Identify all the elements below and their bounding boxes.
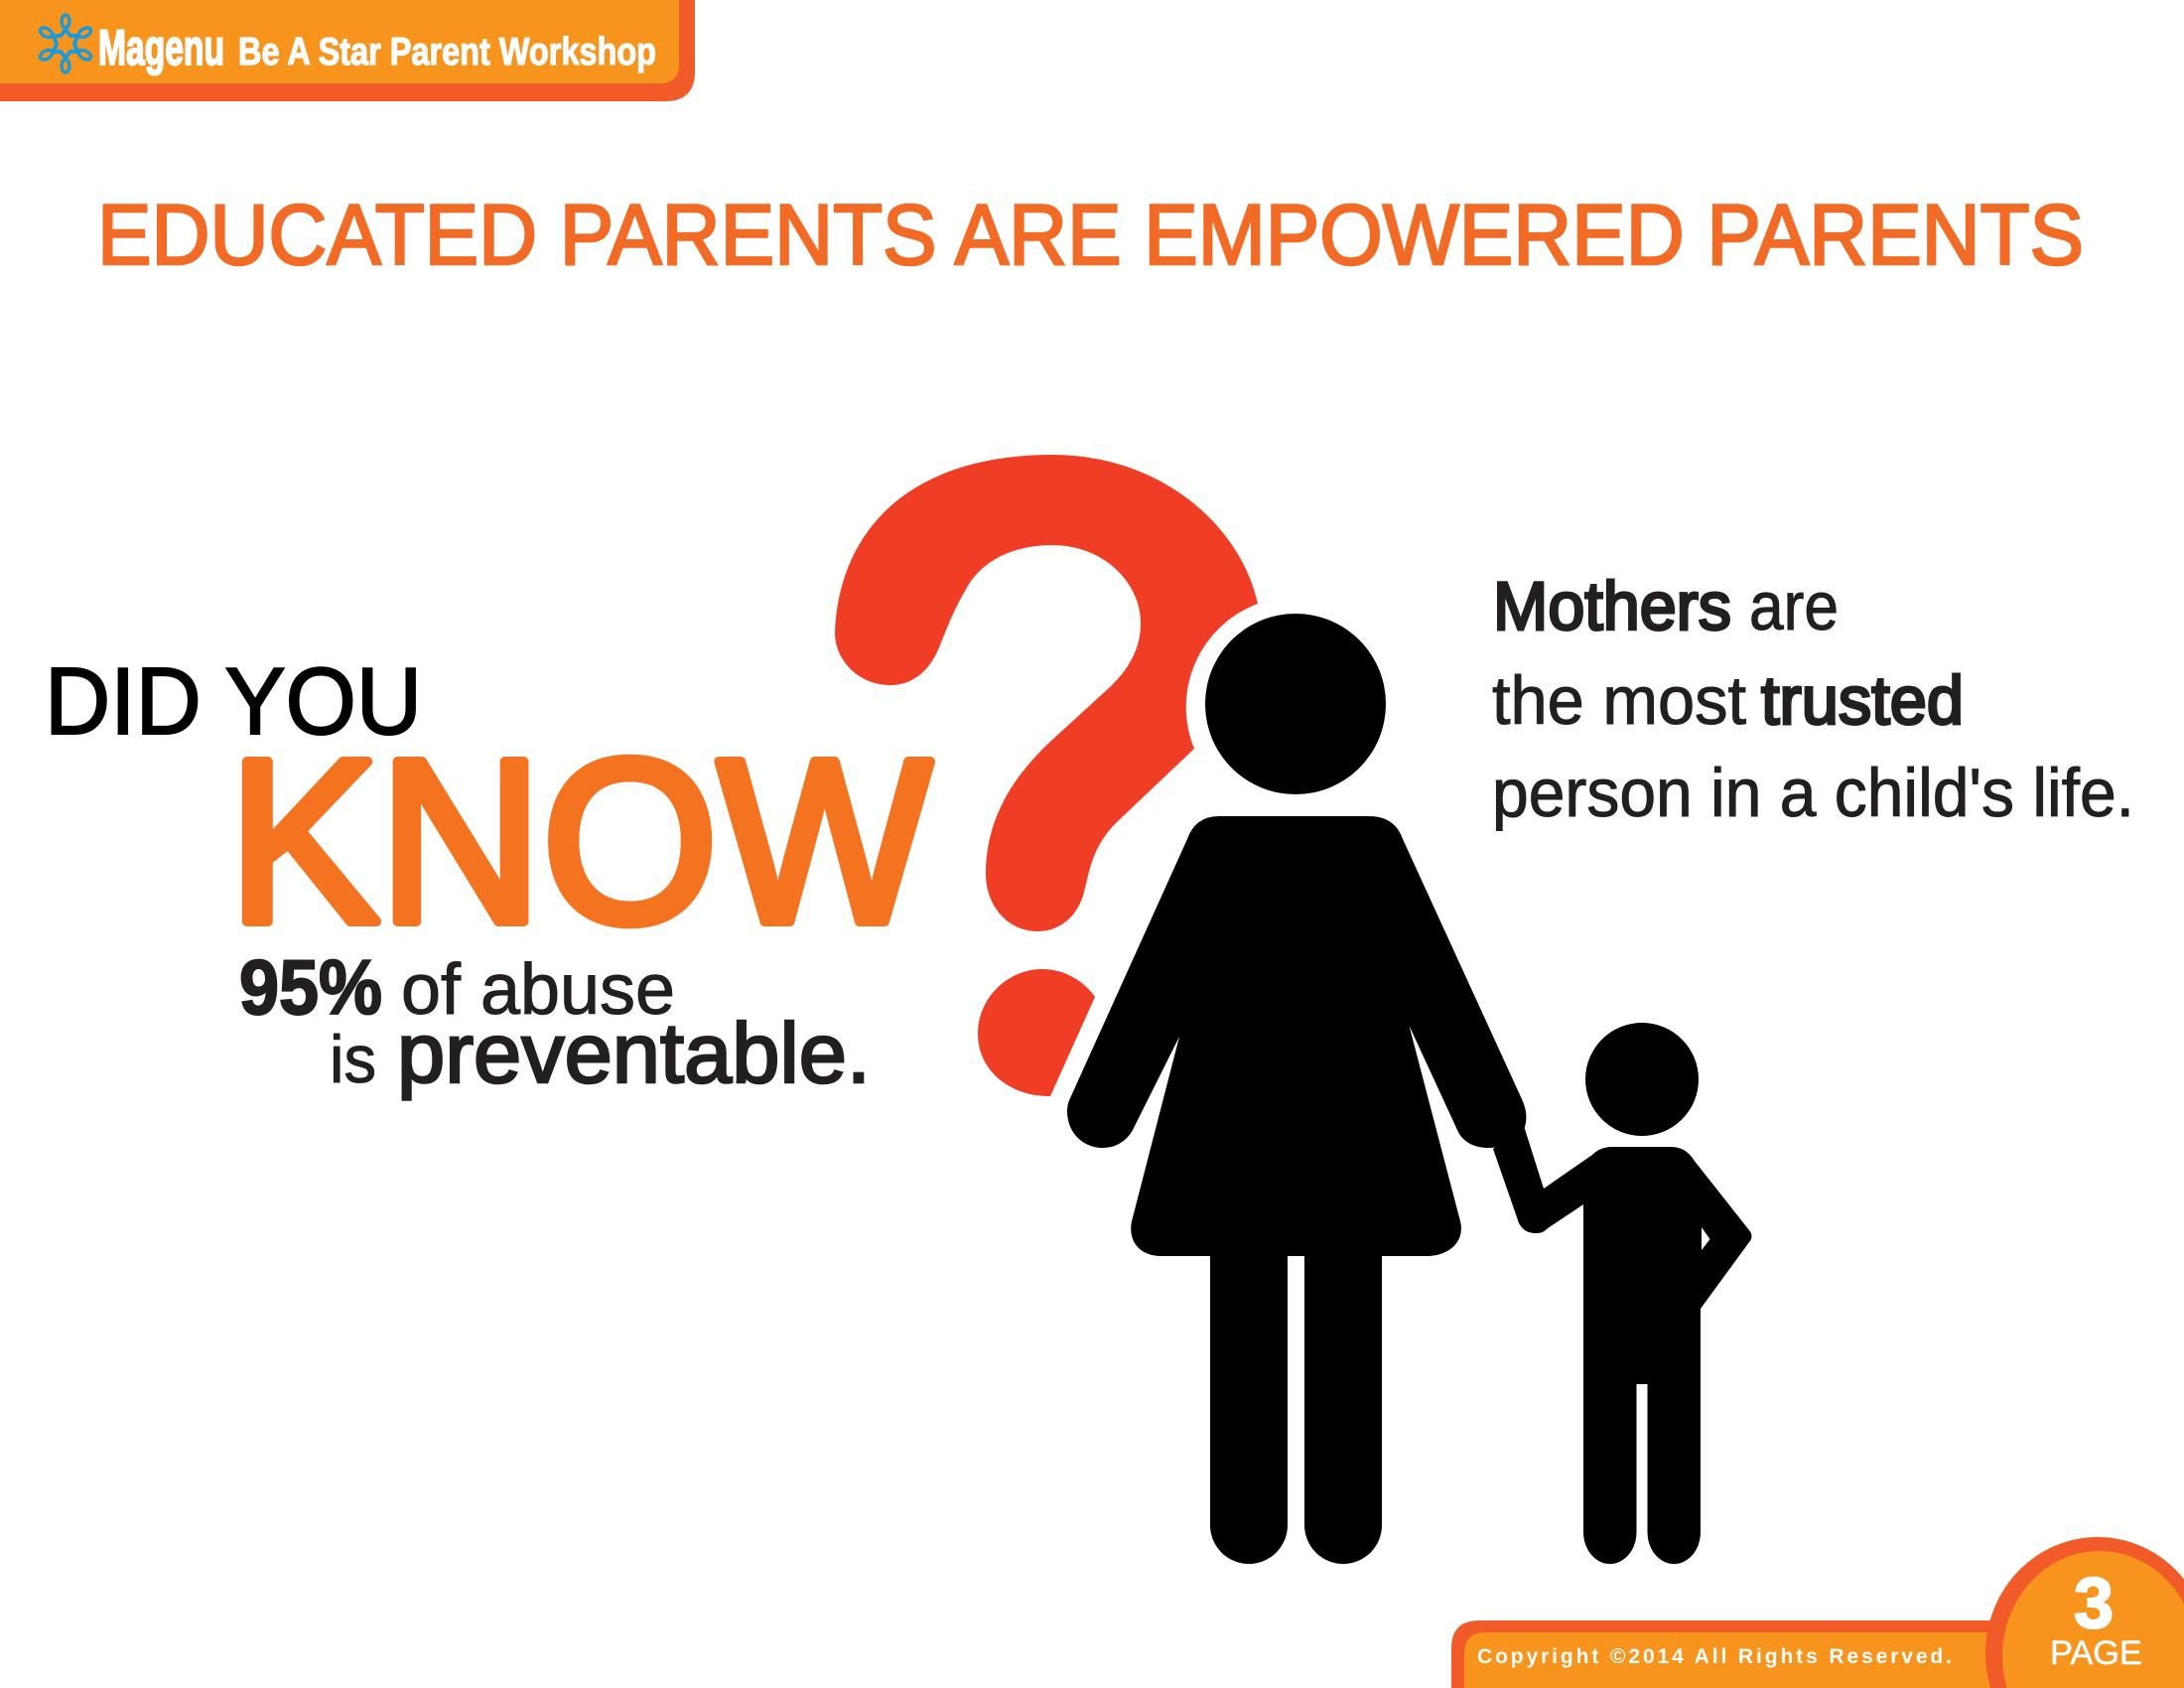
mothers fact text block bbox=[1492, 568, 2134, 831]
child head bbox=[1585, 1023, 1699, 1136]
line: the most trusted: the most bbox=[1492, 662, 1746, 739]
page label: PAGE bbox=[2050, 1634, 2142, 1672]
title: EDUCATED PARENTS ARE EMPOWERED PARENTS bbox=[97, 188, 2084, 283]
mothers fact text block: are bbox=[1749, 568, 1839, 644]
mother figure bbox=[1067, 614, 1526, 1564]
header banner bbox=[0, 0, 695, 101]
line: mothers are: Mothers bbox=[1493, 568, 1731, 644]
did you know text block bbox=[45, 648, 931, 1101]
statistic: is preventable: is bbox=[330, 1022, 376, 1097]
mother body bbox=[1067, 816, 1526, 1564]
page number: 3 bbox=[2074, 1564, 2114, 1643]
line: person in a child's life: person in a child's life. bbox=[1492, 755, 2134, 831]
question mark graphic bbox=[835, 455, 1258, 1096]
workshop name: Be A Star Parent Workshop bbox=[238, 31, 656, 73]
copyright: Copyright ©2014 All Rights Reserved. bbox=[1477, 1645, 1952, 1668]
statistic: 95% of abuse: 95% bbox=[239, 943, 382, 1031]
did you know text block: preventable. bbox=[397, 1007, 871, 1101]
child figure bbox=[1493, 1023, 1751, 1564]
page number badge bbox=[1985, 1537, 2184, 1688]
child body holding hand bbox=[1493, 1126, 1751, 1564]
mothers fact text block: trusted bbox=[1761, 662, 1964, 739]
heading: did you: DID YOU bbox=[45, 648, 422, 755]
icon: Magenu logo bbox=[39, 15, 92, 72]
footer bar bbox=[1451, 1620, 2015, 1688]
brand name: Magenu bbox=[98, 20, 224, 75]
mother head bbox=[1205, 614, 1386, 794]
did you know text block: of abuse bbox=[401, 950, 675, 1030]
heading: know: KNOW bbox=[228, 711, 931, 971]
